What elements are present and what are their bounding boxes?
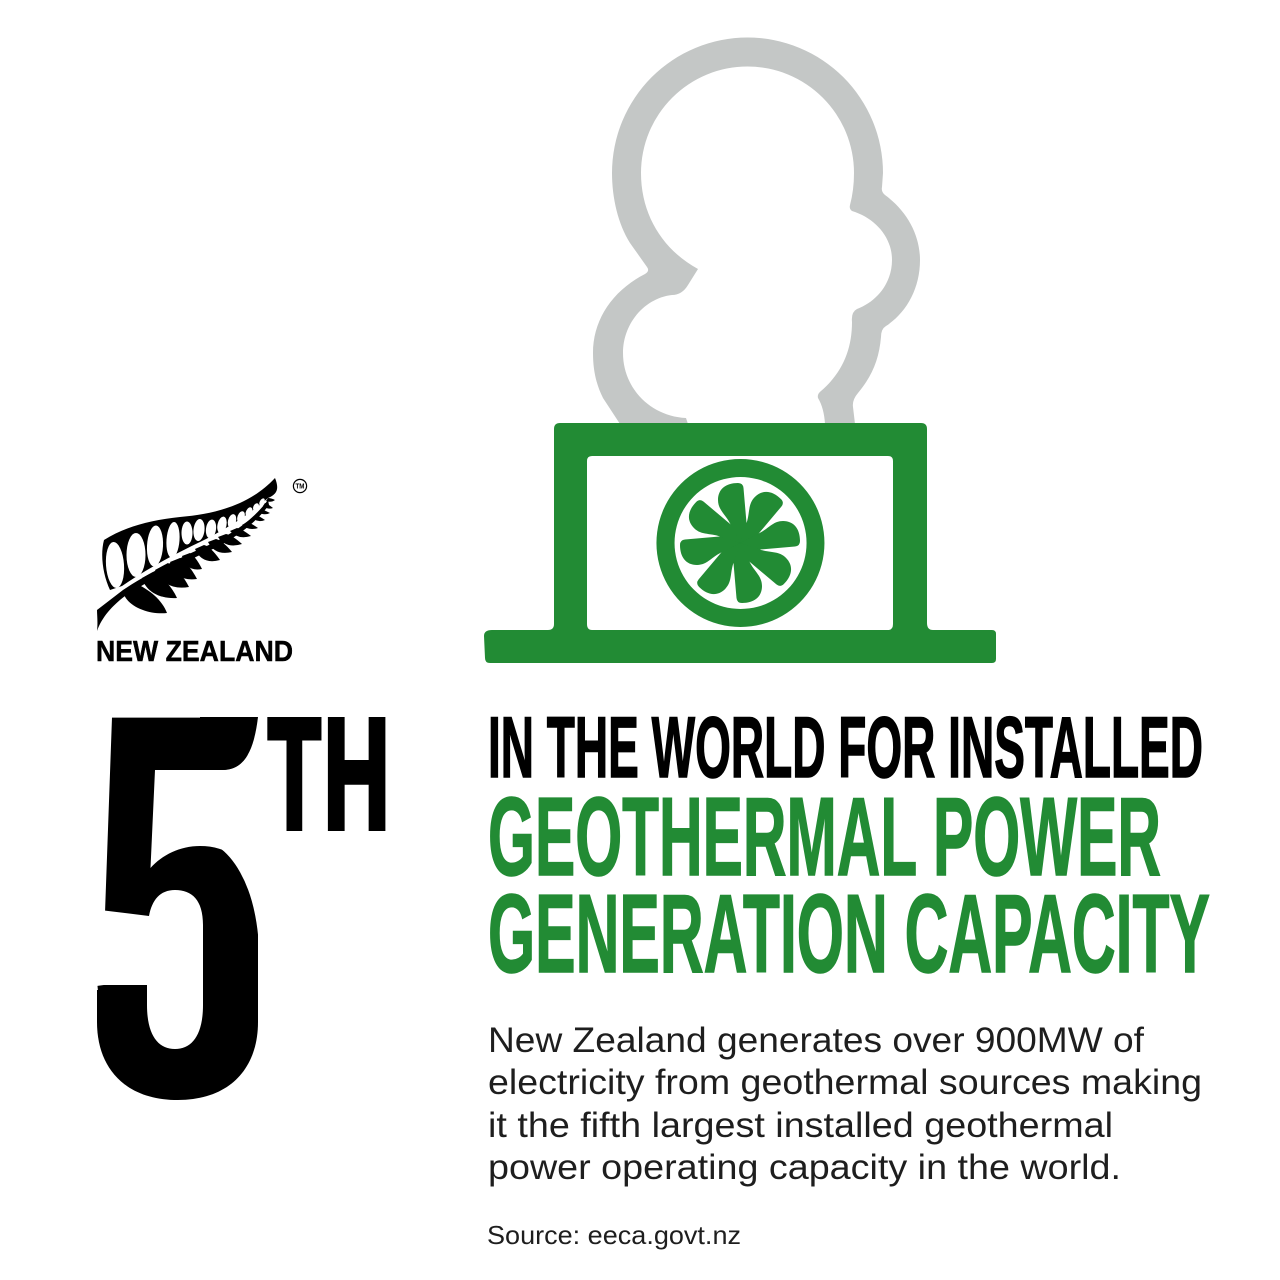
body paragraph: electricity from geothermal sources making bbox=[488, 1063, 1202, 1102]
midrib and stem bbox=[97, 500, 269, 631]
superscript T: T bbox=[268, 685, 321, 861]
icon: fern bbox=[97, 478, 277, 631]
wordmark: NEW ZEALAND bbox=[96, 636, 293, 668]
upper frond silhouette bbox=[102, 478, 277, 590]
lower pinnae bbox=[123, 583, 167, 613]
trademark mark bbox=[293, 479, 307, 493]
icon: steam cloud bbox=[593, 38, 920, 424]
logo: New Zealand silver fern bbox=[96, 478, 307, 668]
superscript H: H bbox=[324, 688, 390, 862]
body paragraph: it the fifth largest installed geothermal bbox=[488, 1106, 1113, 1145]
icon: geothermal power station bbox=[484, 423, 996, 663]
body paragraph: power operating capacity in the world. bbox=[488, 1148, 1121, 1187]
station building and base bbox=[484, 423, 996, 663]
big number: 5th bbox=[91, 615, 390, 1194]
body paragraph: New Zealand generates over 900MW of bbox=[488, 1021, 1144, 1060]
fan ring bbox=[656, 459, 824, 627]
fan blades bbox=[680, 483, 800, 603]
numeral 5: 5 bbox=[95, 615, 262, 1194]
heading bbox=[488, 700, 1210, 996]
source line: Source: eeca.govt.nz bbox=[487, 1220, 741, 1250]
white pinnae openings bbox=[104, 497, 266, 589]
body paragraph bbox=[488, 1021, 1202, 1187]
trademark mark: TM bbox=[296, 484, 305, 491]
